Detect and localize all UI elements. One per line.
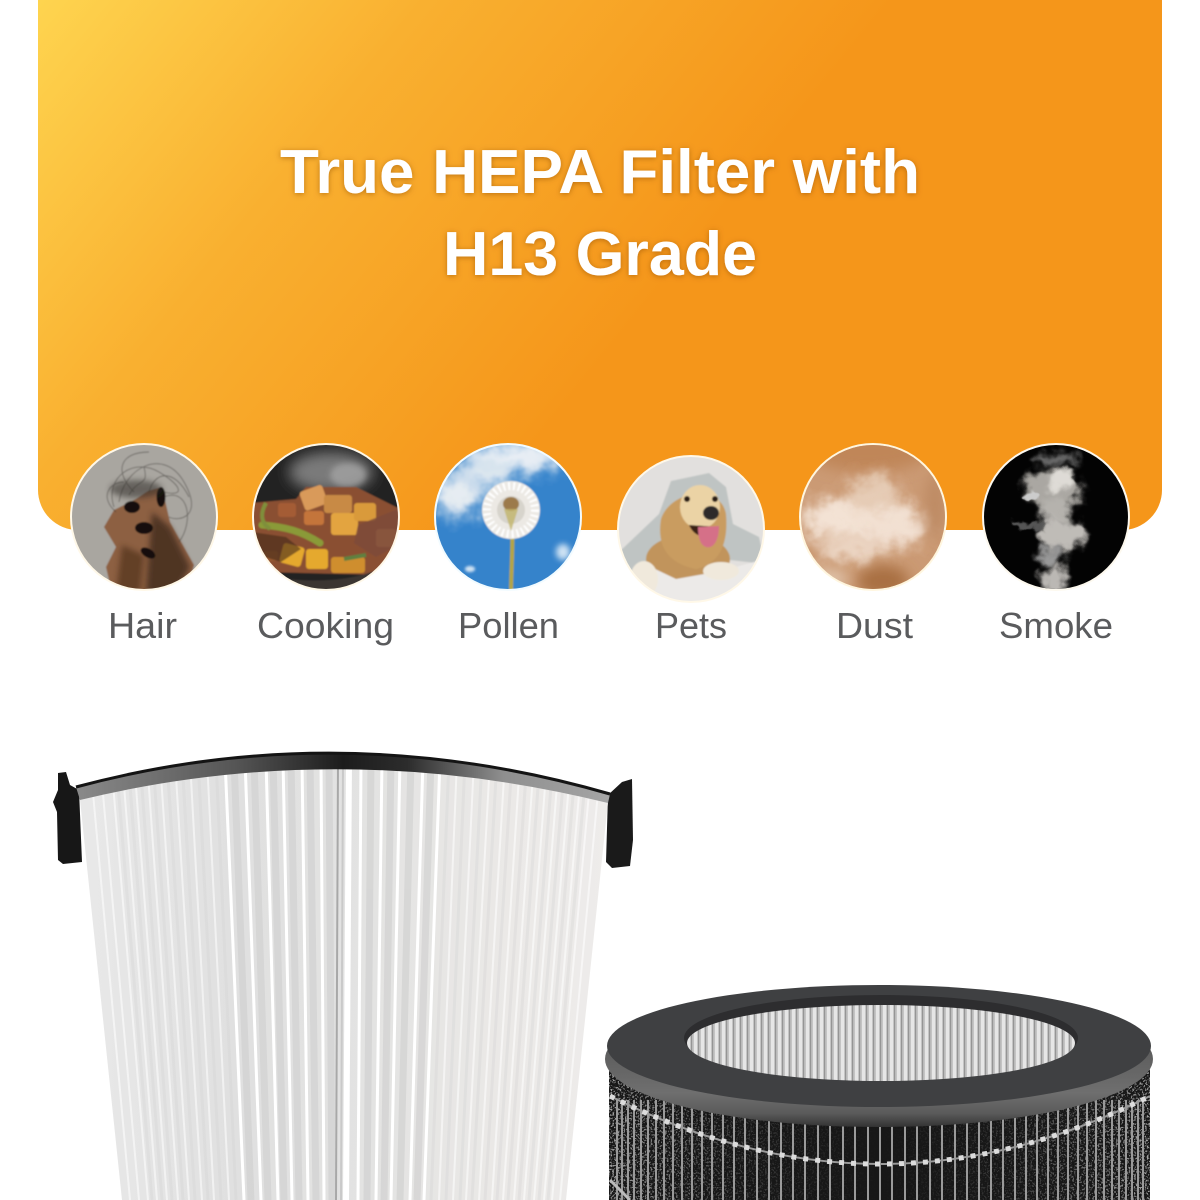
labels: Dust bbox=[836, 605, 913, 646]
icon: left clip tab bbox=[53, 772, 82, 864]
filter top band bbox=[76, 753, 610, 803]
title: H13 Grade bbox=[443, 220, 757, 289]
title: True HEPA Filter with bbox=[280, 138, 920, 207]
inner opening bbox=[684, 995, 1078, 1081]
labels: Pollen bbox=[458, 605, 559, 646]
title bbox=[280, 138, 920, 289]
icon: hair bbox=[70, 443, 218, 593]
dark carbon filter bbox=[605, 985, 1153, 1200]
filter rim bbox=[605, 991, 1153, 1127]
labels: Cooking bbox=[257, 605, 394, 646]
panel: orange gradient header bbox=[38, 0, 1162, 530]
labels: Hair bbox=[108, 605, 177, 646]
labels: Pets bbox=[655, 605, 727, 646]
filter pleats bbox=[80, 769, 608, 1200]
icon: right clip tab bbox=[606, 779, 633, 868]
icon row: pollutants bbox=[70, 432, 1130, 603]
white pleated HEPA filter bbox=[53, 740, 633, 1200]
icon: cooking bbox=[252, 443, 400, 591]
filter body bbox=[609, 1069, 1150, 1200]
icon: smoke bbox=[982, 443, 1130, 595]
labels bbox=[108, 605, 1113, 646]
icon: pollen bbox=[434, 441, 582, 593]
labels: Smoke bbox=[999, 605, 1113, 646]
icon: pets bbox=[617, 455, 765, 603]
icon: dust bbox=[799, 443, 947, 591]
